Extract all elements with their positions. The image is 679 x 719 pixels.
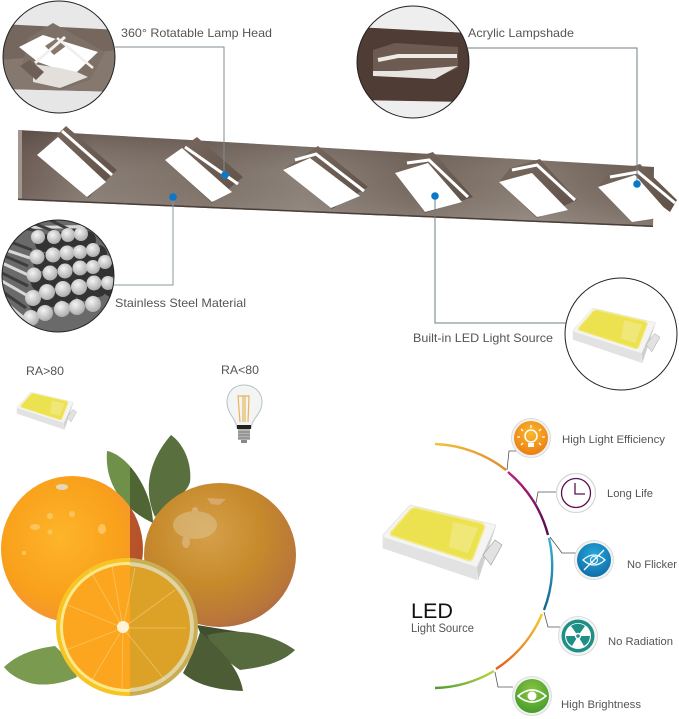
- marker dots: [169, 171, 641, 201]
- icon: small LED chip: [17, 392, 76, 430]
- label: high light efficiency: High Light Efficiency: [562, 434, 666, 446]
- callout line: acrylic: [468, 48, 637, 184]
- callout line: LED: [435, 196, 566, 323]
- label: built-in LED: Built-in LED Light Source: [413, 331, 553, 345]
- orange: right: [144, 483, 296, 627]
- icon: no flicker: [574, 540, 614, 580]
- icon: long life clock: [556, 474, 596, 512]
- leaf: upper right: [149, 435, 190, 517]
- label: RA below 80: RA<80: [221, 363, 259, 377]
- label: RA above 80: RA>80: [26, 364, 64, 378]
- label: long life: Long Life: [607, 488, 653, 500]
- inset: LED chip: [565, 278, 677, 390]
- icon: high brightness eye: [512, 676, 552, 716]
- icon: high light efficiency: [512, 418, 550, 458]
- connector lines: [495, 451, 577, 687]
- orange: left dull: [130, 507, 143, 560]
- icon: no radiation: [558, 616, 598, 656]
- lamp head 5: [499, 159, 577, 218]
- leaf: lower right: [207, 632, 295, 670]
- inset: rotatable lamp head: [0, 0, 120, 115]
- label: high brightness: High Brightness: [561, 699, 642, 711]
- label: acrylic lampshade: Acrylic Lampshade: [468, 26, 574, 40]
- label: stainless steel: Stainless Steel Material: [115, 296, 246, 310]
- callout line: steel: [113, 197, 173, 285]
- lamp head 6: [598, 164, 677, 222]
- callout line: rotatable head: [115, 47, 224, 175]
- leaf: lower center: [183, 632, 243, 691]
- backplate: [18, 130, 654, 227]
- inset: acrylic lampshade: [356, 6, 470, 118]
- lamp head 2: [165, 137, 243, 203]
- leaf: upper left: [107, 451, 153, 523]
- lamp head 4: [395, 152, 473, 213]
- orange slice: [56, 558, 198, 696]
- illustration: oranges and leaves: [1, 435, 296, 696]
- leaf: behind lower right: [197, 625, 240, 645]
- lamp head 3: [283, 146, 368, 209]
- label: no flicker: No Flicker: [627, 559, 677, 571]
- label: no radiation: No Radiation: [608, 636, 673, 648]
- heading: LED: LED: [411, 600, 453, 623]
- orange: left vivid: [1, 476, 130, 620]
- LED chip illustration: [383, 505, 502, 580]
- leaf: lower left: [4, 646, 77, 685]
- inset: steel rods: [0, 218, 121, 334]
- icon: filament bulb: [227, 385, 262, 443]
- label: light source: Light Source: [411, 623, 474, 635]
- arc segments: [435, 444, 552, 688]
- lamp fixture: [18, 126, 677, 227]
- label: rotatable head: 360° Rotatable Lamp Head: [121, 26, 272, 40]
- lamp head 1: [37, 126, 117, 198]
